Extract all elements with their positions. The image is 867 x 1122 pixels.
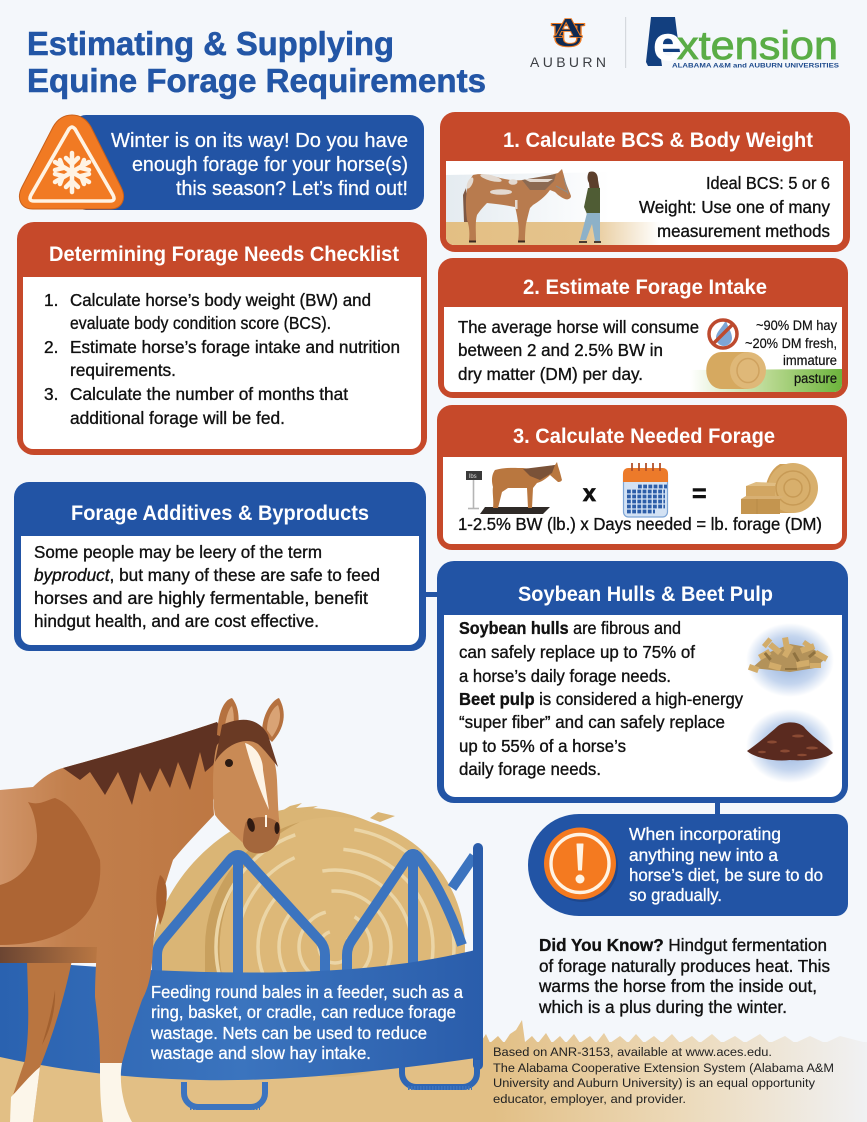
callout: warning (528, 814, 848, 916)
step 2 text: The average horse will consume (458, 317, 699, 337)
soybean and beet text: Beet pulp is considered a high-energy (459, 689, 743, 709)
step 2 text (458, 317, 699, 384)
step 1 text: measurement methods (657, 221, 830, 241)
body text: horses and are highly fermentable, benefit (34, 588, 368, 608)
checklist items: 3. (44, 384, 58, 404)
multiply sign: x (583, 480, 596, 506)
icon: scale and horse (466, 462, 562, 514)
dry matter labels: immature (783, 353, 837, 368)
text: did you know: warms the horse from the inside out, (538, 976, 817, 996)
blaze (245, 743, 269, 810)
mane (63, 722, 225, 805)
footer: University and Auburn University) is an equal opportunity (493, 1076, 816, 1090)
checklist items: Calculate the number of months that (70, 384, 348, 404)
warning text: When incorporating (629, 824, 781, 844)
feeder text: wastage. Nets can be used to reduce (150, 1023, 427, 1043)
equals sign: = (692, 480, 707, 508)
illustration: chestnut horse (0, 698, 284, 1122)
title: Estimating & Supplying (27, 25, 394, 62)
illustration: horse and handler (446, 169, 660, 245)
heading: Determining Forage Needs Checklist (49, 243, 399, 266)
warning text: anything new into a (629, 845, 778, 865)
panel: checklist (17, 222, 427, 455)
body text: byproduct, but many of these are safe to feed (34, 565, 380, 585)
checklist items: evaluate body condition score (BCS). (70, 313, 331, 333)
checklist items: 2. (44, 337, 58, 357)
panel: step 2 (438, 258, 848, 398)
feeder text: Feeding round bales in a feeder, such as a (151, 982, 463, 1002)
heading: Soybean Hulls & Beet Pulp (518, 583, 773, 606)
muzzle (243, 817, 280, 853)
shoulder shading (0, 798, 100, 945)
icon: exclamation (544, 828, 618, 902)
text: did you know (538, 935, 830, 1017)
checklist items: requirements. (70, 360, 176, 380)
divider (625, 17, 626, 68)
connector: soybean panel to warning (715, 802, 720, 816)
checklist items: 1. (44, 290, 58, 310)
body text (34, 542, 380, 631)
icon: scale and horse: lbs (469, 474, 477, 480)
eye (225, 759, 233, 767)
panel: feeder banner (0, 948, 483, 1080)
back leg (10, 960, 72, 1122)
soybean and beet text: “super fiber” and can safely replace (459, 712, 725, 732)
head (213, 733, 280, 853)
panel: soybean hulls and beet pulp (437, 561, 848, 803)
checklist items: Estimate horse’s forage intake and nutrition (70, 337, 400, 357)
panel: step 1 (440, 112, 850, 252)
belly shadow (0, 945, 100, 963)
front sock (100, 1063, 132, 1122)
icon: beet pulp pile (746, 709, 834, 783)
panel: forage additives and byproducts (14, 482, 426, 651)
logo: Auburn (530, 13, 606, 70)
soybean and beet text: can safely replace up to 75% of (459, 642, 695, 662)
warning text: so gradually. (629, 885, 722, 905)
heading: Forage Additives & Byproducts (71, 502, 369, 525)
icon: snowflake warning triangle (19, 115, 124, 209)
heading: 2. Estimate Forage Intake (523, 276, 767, 299)
title (27, 25, 486, 99)
callout text: enough forage for your horse(s) (132, 153, 408, 176)
formula text: 1-2.5% BW (lb.) x Days needed = lb. forage (DM) (458, 514, 822, 534)
footer: Based on ANR-3153, available at www.aces.edu. (493, 1045, 772, 1059)
ears (217, 698, 239, 742)
dry matter labels: ~90% DM hay (756, 318, 837, 333)
logo: Auburn: U (551, 17, 585, 54)
icon: hay bales (741, 463, 818, 514)
logo: Alabama Extension: e (653, 18, 682, 71)
footer (493, 1045, 834, 1106)
icon: round bale (706, 352, 766, 389)
callout text: Winter is on its way! Do you have (111, 129, 408, 152)
forelock (215, 720, 278, 767)
banner background (72, 115, 424, 210)
text: did you know: which is a plus during the winter. (538, 997, 787, 1017)
ground and grass (0, 1020, 867, 1122)
step 1 text (639, 173, 830, 241)
callout text: this season? Let’s find out! (176, 177, 408, 200)
step 1 text: Weight: Use one of many (639, 197, 830, 217)
text: did you know: of forage naturally produces heat. This (539, 956, 830, 976)
checklist items: Calculate horse’s body weight (BW) and (70, 290, 371, 310)
icon: calendar (623, 463, 668, 517)
body text: hindgut health, and are cost effective. (34, 611, 319, 631)
step 2 text: dry matter (DM) per day. (458, 364, 643, 384)
connector: additives to soybean panel (425, 592, 440, 597)
body text: Some people may be leery of the term (34, 542, 322, 562)
step 1 text: Ideal BCS: 5 or 6 (706, 173, 830, 193)
logo: Auburn: A (554, 13, 583, 43)
heading: 3. Calculate Needed Forage (513, 425, 775, 448)
soybean and beet text: Soybean hulls are fibrous and (459, 618, 681, 638)
callout: winter (19, 115, 424, 210)
green pasture (690, 369, 842, 392)
illustration: round bale (153, 803, 465, 1077)
soybean and beet text (459, 618, 743, 779)
panel: step 3 (437, 405, 847, 550)
text: did you know: Did You Know? Hindgut fermentation (539, 935, 827, 955)
dry matter labels (745, 318, 837, 386)
title: Equine Forage Requirements (27, 62, 486, 99)
soybean and beet text: a horse’s daily forage needs. (459, 666, 671, 686)
step 2 text: between 2 and 2.5% BW in (458, 340, 663, 360)
soybean and beet text: up to 55% of a horse’s (459, 736, 626, 756)
body, neck and front leg (0, 722, 225, 1063)
heading: 1. Calculate BCS & Body Weight (503, 129, 813, 152)
checklist items: additional forage will be fed. (70, 408, 285, 428)
footer: educator, employer, and provider. (493, 1092, 686, 1106)
illustration: hay feeder (157, 848, 478, 1108)
feeder text: wastage and slow hay intake. (150, 1043, 371, 1063)
logo: Alabama Extension: xtension (677, 24, 838, 68)
icon: no water (709, 320, 737, 348)
logo: Alabama Extension (646, 17, 839, 71)
footer: The Alabama Cooperative Extension System (Alabama A&M (493, 1061, 834, 1075)
logo: Alabama Extension: ALABAMA A&M and AUBURN UNIVERSITIES (672, 62, 839, 70)
soybean and beet text: daily forage needs. (459, 759, 601, 779)
icon: soybean hull pellets (746, 623, 834, 697)
feeder text (150, 982, 463, 1063)
logo: Auburn: AUBURN (530, 54, 606, 70)
dry matter labels: pasture (794, 371, 837, 386)
callout text (111, 129, 408, 200)
warning text (629, 824, 823, 905)
dry matter labels: ~20% DM fresh, (745, 336, 837, 351)
feeder text: ring, basket, or cradle, can reduce forage (151, 1002, 456, 1022)
checklist items (44, 290, 400, 428)
warning text: horse’s diet, be sure to do (629, 865, 823, 885)
